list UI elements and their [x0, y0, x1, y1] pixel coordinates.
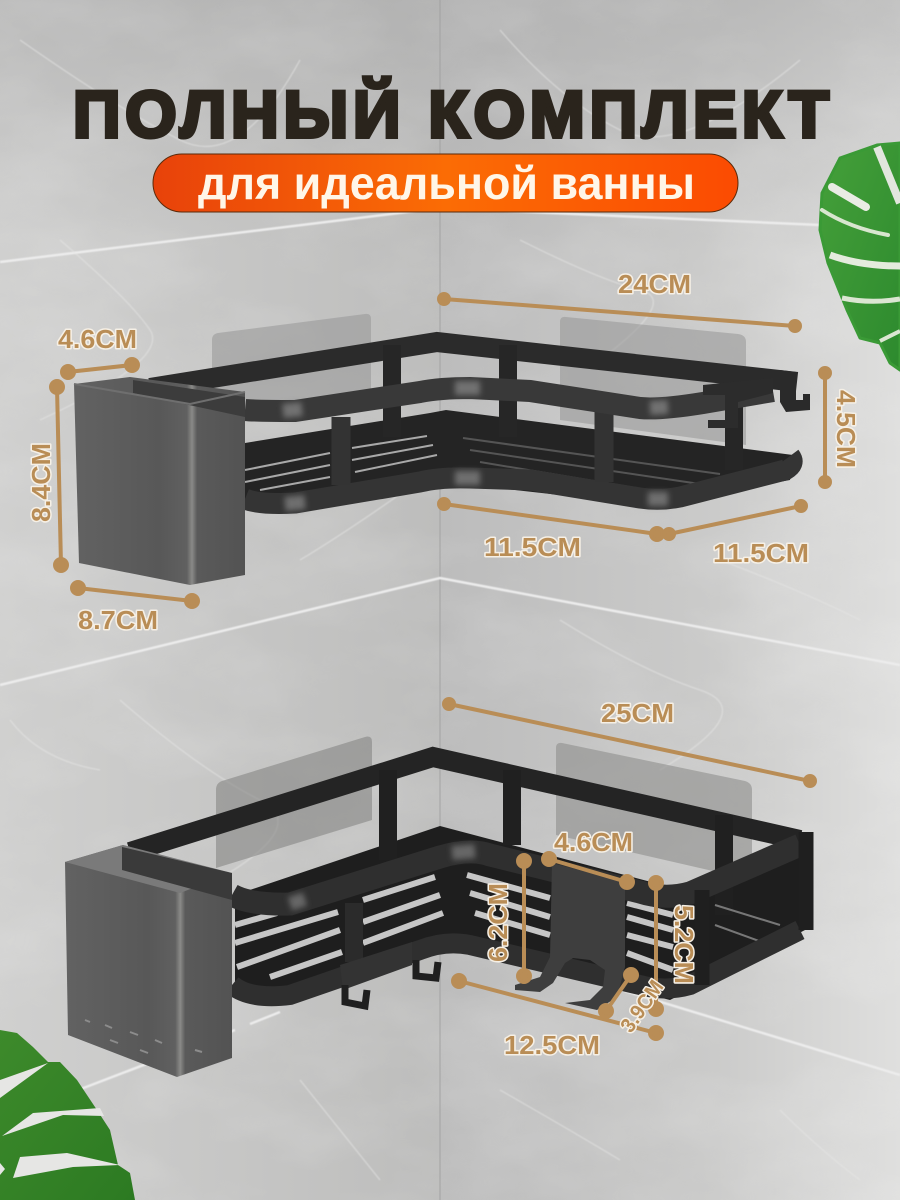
- title: ПОЛНЫЙ КОМПЛЕКТ: [73, 76, 829, 151]
- dimension 6.2CM: 6.2CM: [483, 883, 513, 962]
- tray rim: [245, 456, 792, 504]
- adhesive plates: [212, 314, 746, 445]
- dimension 12.5CM: 12.5CM: [504, 1030, 600, 1060]
- front post: [345, 903, 363, 962]
- dimension 8.7CM: 8.7CM: [78, 605, 158, 635]
- leaf: bottom left: [0, 1030, 135, 1200]
- front rail highlights: [283, 388, 668, 411]
- back posts: [388, 770, 724, 915]
- lower shelf: [130, 737, 806, 1010]
- front rail highlights: [290, 851, 475, 904]
- front rail: [232, 845, 800, 904]
- dimension 5.2CM: [650, 877, 699, 1015]
- dimension 12.5CM: [453, 975, 662, 1060]
- dimension 24CM: [439, 269, 800, 331]
- tray rim: [232, 930, 800, 996]
- dimension 5.2CM: 5.2CM: [669, 905, 699, 984]
- upper cup: [74, 377, 245, 585]
- end hook: [780, 370, 810, 412]
- hanger bracket: [703, 378, 773, 428]
- subtitle pill: для идеальной ванны: [198, 157, 695, 209]
- lower cup: [65, 845, 232, 1077]
- dimension 4.6CM hook: [543, 827, 633, 888]
- dimension 11.5CM left: 11.5CM: [484, 532, 581, 562]
- dimension 6.2CM: [483, 855, 530, 982]
- small hooks: [340, 942, 438, 1006]
- dimension 8.7CM: [72, 582, 198, 635]
- dimension 3.9CM: 3.9CM: [616, 976, 668, 1037]
- dimension 24CM: 24CM: [618, 269, 691, 299]
- dimension 3.9CM: [600, 969, 668, 1037]
- front rail: [245, 388, 773, 411]
- tray: [235, 826, 805, 1005]
- back rail: [150, 342, 797, 388]
- dimension 11.5CM right: [664, 501, 809, 568]
- dimension 4.5CM: [820, 368, 861, 487]
- back rail: [130, 757, 800, 852]
- adhesive plates: [216, 737, 752, 880]
- dimension 4.6CM upper: [58, 324, 138, 378]
- dimension 4.5CM: 4.5CM: [831, 390, 861, 468]
- dimension 25CM: 25CM: [601, 698, 674, 728]
- leaf: top right: [820, 143, 900, 370]
- dimension 11.5CM right: 11.5CM: [713, 538, 809, 568]
- right end frame: [702, 832, 806, 985]
- large hook: [515, 863, 625, 1010]
- dimension 25CM: [444, 698, 815, 786]
- dimension 4.6CM hook: 4.6CM: [554, 827, 633, 857]
- tray: [245, 410, 793, 510]
- dimension 4.6CM upper: 4.6CM: [58, 324, 137, 354]
- back posts: [392, 345, 734, 470]
- upper shelf: [150, 314, 810, 510]
- dimension 8.4CM: [26, 381, 67, 571]
- tray slats: [245, 436, 437, 490]
- dimension 11.5CM left: [439, 499, 663, 562]
- front posts: [341, 412, 604, 485]
- tray rim highlights: [285, 478, 668, 504]
- tray slats: [235, 875, 673, 977]
- dimension 8.4CM: 8.4CM: [26, 443, 56, 522]
